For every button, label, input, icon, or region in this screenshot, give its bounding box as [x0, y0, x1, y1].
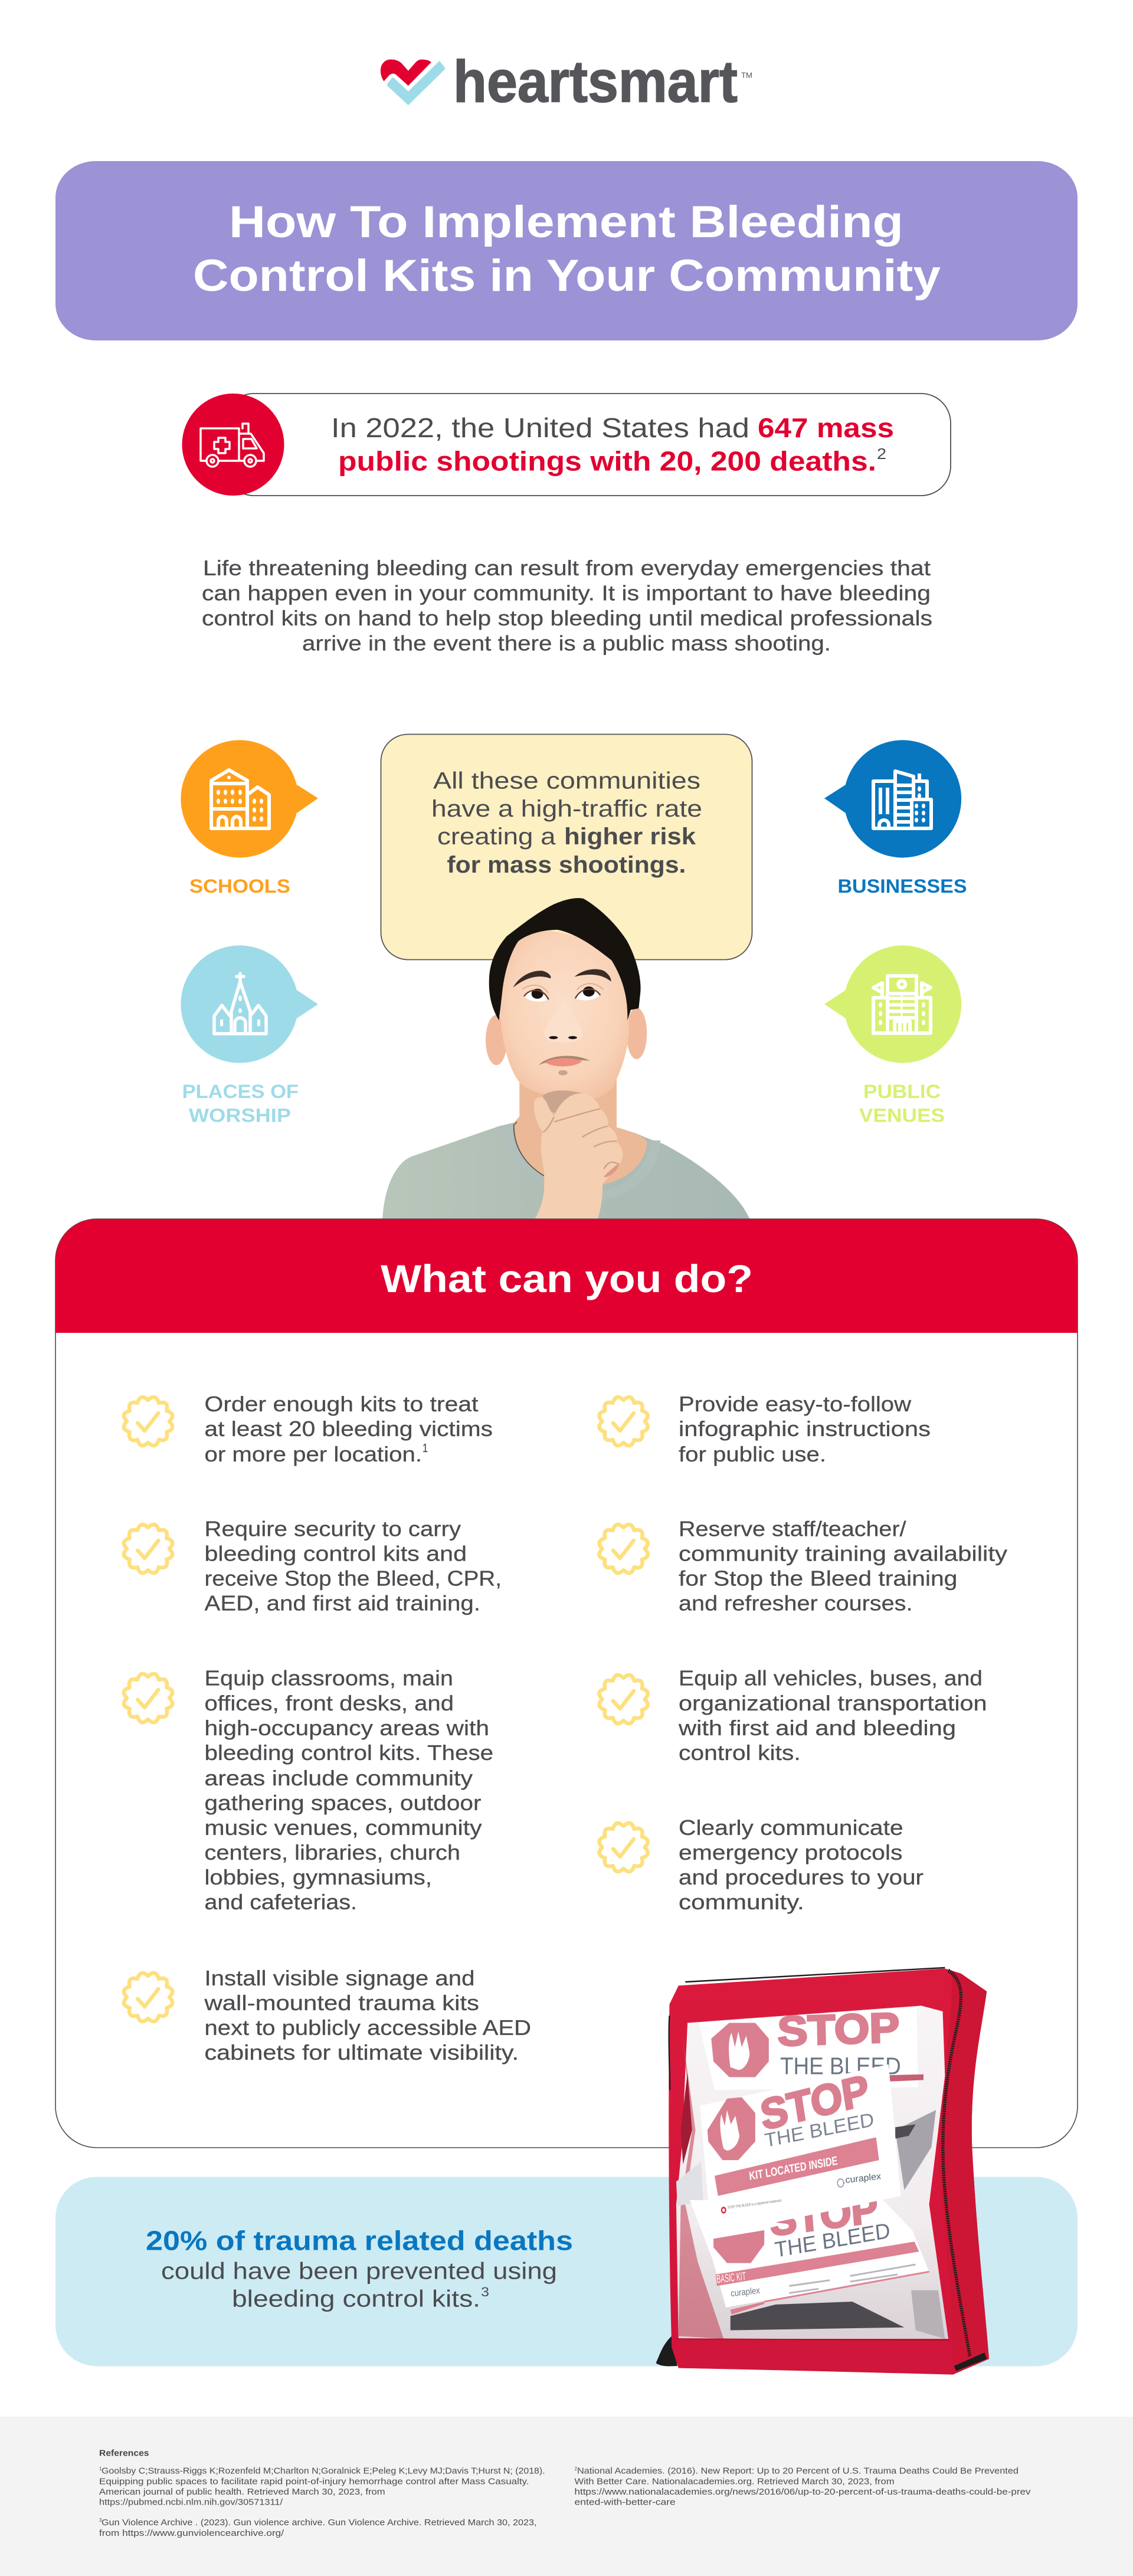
kit sheet: middle label: KIT LOCATED INSIDE [748, 2154, 838, 2182]
action text: and cafeterias. [204, 1890, 357, 1914]
action: require security [124, 1516, 502, 1615]
action text: next to publicly accessible AED [204, 2015, 531, 2040]
statistic text: In 2022, the United States had [331, 412, 749, 443]
bubble text: for mass shootings. [447, 852, 686, 878]
kit sheet: middle label: curaplex [845, 2171, 881, 2185]
action text [679, 1392, 931, 1466]
action text: Clearly communicate [679, 1815, 903, 1840]
bubble text: higher risk [564, 824, 696, 850]
action text: music venues, community [204, 1815, 482, 1840]
bubble text: creating a [437, 824, 556, 850]
action text: Equip all vehicles, buses, and [679, 1666, 983, 1690]
action: equip vehicles [599, 1666, 987, 1765]
photo: red bleeding control kit bag [656, 1968, 989, 2375]
kit sheet: middle label: THE BLEED [764, 2109, 875, 2152]
action text: gathering spaces, outdoor [204, 1791, 482, 1815]
reference 2: https://www.nationalacademies.org/news/2016/06/up-to-20-percent-of-us-trauma-deaths-could-be-prev [575, 2487, 1031, 2497]
logo wordmark: heartsmart [453, 49, 738, 115]
callout text: bleeding control kits. [232, 2286, 480, 2312]
label: places of worship: PLACES OF [182, 1081, 299, 1102]
label: schools: SCHOOLS [189, 876, 290, 897]
statistic text: 2 [877, 445, 886, 463]
kit sheet: middle label: STOP THE BLEED is a registered trademark [728, 2199, 782, 2210]
action text: Equip classrooms, main [204, 1666, 453, 1690]
panel: what can you do [55, 1219, 1078, 2148]
action text [204, 1516, 502, 1615]
icon: check badge [599, 1397, 648, 1446]
panel header [55, 1219, 1078, 1333]
references [0, 2417, 1133, 2576]
action: reserve training [599, 1516, 1007, 1615]
action text: infographic instructions [679, 1417, 931, 1441]
reference 2: With Better Care. Nationalacademies.org. Retrieved March 30, 2023, from [575, 2477, 895, 2486]
action text: AED, and first aid training. [204, 1591, 480, 1615]
icon: check badge [599, 1823, 648, 1872]
title: Control Kits in Your Community [193, 251, 941, 301]
kit sheet: front: STOP [768, 2186, 880, 2244]
action text: organizational transportation [679, 1691, 987, 1715]
callout: trauma deaths [55, 2177, 1078, 2366]
community: public venues [824, 945, 961, 1126]
action text: with first aid and bleeding [678, 1716, 956, 1740]
statistic text: public shootings with 20, 200 deaths. [338, 446, 876, 477]
action text: lobbies, gymnasiums, [204, 1865, 432, 1889]
action: provide instructions [599, 1392, 931, 1466]
reference 3: 3 [99, 2518, 102, 2523]
intro paragraph: control kits on hand to help stop bleeding until medical professionals [202, 606, 932, 630]
label: public venues: PUBLIC [863, 1081, 941, 1102]
action text: Order enough kits to treat [204, 1392, 478, 1416]
action text: community. [679, 1890, 804, 1914]
action text: control kits. [679, 1741, 801, 1765]
reference 2: National Academies. (2016). New Report: Up to 20 Percent of U.S. Trauma Deaths Could Be Prevented [577, 2467, 1019, 2476]
heading: What can you do? [381, 1257, 753, 1300]
action text: 1 [423, 1442, 428, 1455]
action text: or more per location. [204, 1442, 422, 1466]
action text: Provide easy-to-follow [679, 1392, 912, 1416]
action: install signage [124, 1966, 531, 2064]
statistic callout [182, 394, 951, 496]
kit sheet: back: THE BLEED [780, 2053, 901, 2080]
reference 2: ented-with-better-care [575, 2498, 676, 2508]
action text: for public use. [679, 1442, 826, 1466]
intro paragraph [202, 556, 932, 656]
reference 2: 2 [575, 2466, 577, 2472]
action text: Reserve staff/teacher/ [679, 1516, 906, 1541]
label: places of worship: WORSHIP [189, 1105, 291, 1126]
action text: bleeding control kits. These [204, 1741, 493, 1765]
bubble text [431, 768, 702, 878]
icon: office buildings [824, 740, 961, 858]
reference 3: Gun Violence Archive . (2023). Gun violence archive. Gun Violence Archive. Retrieved March 30, 2023, [101, 2518, 537, 2528]
action text: and refresher courses. [679, 1591, 912, 1615]
label: public venues: VENUES [859, 1105, 945, 1126]
action text [204, 1392, 493, 1466]
label: businesses: BUSINESSES [838, 876, 967, 897]
icon: check badge [124, 1973, 172, 2021]
action text: wall-mounted trauma kits [204, 1991, 479, 2015]
title [193, 197, 941, 301]
action: equip classrooms [124, 1666, 493, 1914]
reference 1: American journal of public health. Retrieved March 30, 2023, from [99, 2487, 385, 2497]
action: order kits [124, 1392, 493, 1466]
kit sheet: front: BASIC KIT [716, 2269, 746, 2286]
action text [678, 1666, 987, 1765]
icon: check badge [124, 1674, 172, 1722]
action text: Install visible signage and [204, 1966, 474, 1990]
kit sheet: back: STOP [777, 2004, 900, 2055]
action text: receive Stop the Bleed, CPR, [204, 1566, 502, 1591]
action text: high-occupancy areas with [204, 1716, 489, 1740]
callout text [146, 2226, 573, 2312]
icon: school [181, 740, 318, 858]
action text [679, 1815, 924, 1914]
references heading: References [99, 2449, 149, 2459]
callout text: 3 [481, 2285, 489, 2299]
logo: heartsmart [381, 49, 752, 115]
reference 3 [99, 2518, 537, 2538]
icon: check badge [599, 1525, 648, 1573]
title panel [55, 161, 1078, 340]
action text: community training availability [679, 1541, 1007, 1565]
kit sheet: middle label [700, 2064, 901, 2236]
title: How To Implement Bleeding [229, 197, 903, 247]
action text: cabinets for ultimate visibility. [204, 2040, 519, 2064]
callout text: 20% of trauma related deaths [146, 2226, 573, 2256]
action text: bleeding control kits and [204, 1541, 467, 1565]
action text [204, 1666, 493, 1914]
action text: at least 20 bleeding victims [204, 1417, 493, 1441]
kit sheet: front: curaplex [731, 2285, 760, 2299]
kit sheet: middle label: STOP [757, 2066, 872, 2139]
kit sheet: back [699, 2004, 924, 2090]
kit sheet: front [690, 2186, 929, 2315]
action text: offices, front desks, and [204, 1691, 454, 1715]
icon: check badge [599, 1675, 648, 1723]
kit sheet: front: THE BLEED [774, 2219, 892, 2263]
callout text: could have been prevented using [161, 2258, 557, 2284]
photo: thinking man [382, 898, 750, 1219]
bubble text: have a high-traffic rate [431, 796, 702, 822]
icon: ambulance [201, 424, 264, 467]
action text [204, 1966, 531, 2064]
trademark: TM [741, 71, 752, 80]
reference 1: 1 [99, 2466, 102, 2472]
action text: Require security to carry [204, 1516, 461, 1541]
reference 2 [575, 2466, 1031, 2508]
label: places of worship [182, 1081, 299, 1126]
statistic text [331, 412, 894, 477]
action text: centers, libraries, church [204, 1840, 460, 1864]
reference 1: Equipping public spaces to facilitate rapid point-of-injury hemorrhage control after Mass Casualty. [99, 2477, 529, 2486]
action text [679, 1516, 1007, 1615]
action text: emergency protocols [679, 1840, 902, 1864]
reference 1: https://pubmed.ncbi.nlm.nih.gov/30571311/ [99, 2498, 283, 2508]
icon: venue building [824, 945, 961, 1063]
label: public venues [859, 1081, 945, 1126]
intro paragraph: arrive in the event there is a public mass shooting. [302, 631, 831, 656]
reference 3: from https://www.gunviolencearchive.org/ [99, 2529, 284, 2538]
icon: church [181, 945, 318, 1063]
reference 1: Goolsby C;Strauss-Riggs K;Rozenfeld M;Charlton N;Goralnick E;Peleg K;Levy MJ;Davis T;Hurst N; (2018). [101, 2467, 545, 2476]
speech bubble [381, 734, 752, 959]
icon: check badge [124, 1397, 172, 1446]
intro paragraph: Life threatening bleeding can result from everyday emergencies that [203, 556, 931, 580]
icon: check badge [124, 1525, 172, 1573]
community: places of worship [181, 945, 318, 1126]
action text: for Stop the Bleed training [679, 1566, 957, 1591]
icon: heart check [381, 60, 445, 105]
intro paragraph: can happen even in your community. It is important to have bleeding [202, 581, 931, 605]
community: schools [181, 740, 318, 897]
statistic text: 647 mass [758, 412, 894, 443]
action: communicate protocols [599, 1815, 924, 1914]
reference 1 [99, 2466, 545, 2508]
action text: areas include community [204, 1766, 473, 1790]
bubble text: All these communities [433, 768, 700, 794]
action text: and procedures to your [679, 1865, 924, 1889]
community: businesses [824, 740, 967, 897]
